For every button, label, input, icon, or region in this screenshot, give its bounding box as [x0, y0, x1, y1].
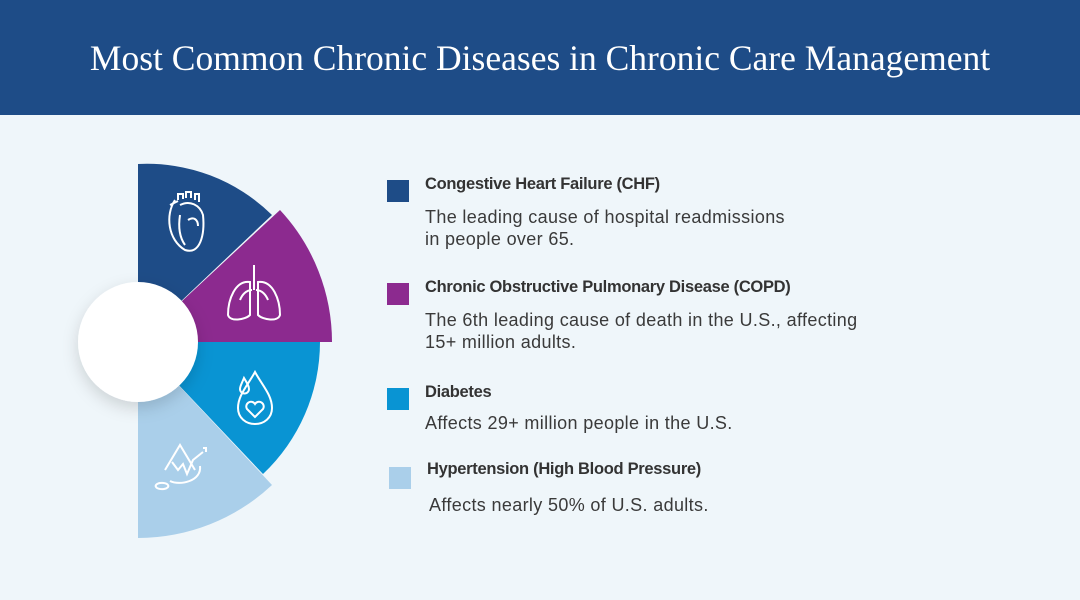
legend item: CHF [387, 175, 785, 249]
title: Most Common Chronic Diseases in Chronic Care Management [90, 38, 990, 78]
icon: lungs [228, 265, 280, 320]
legend item: Hypertension: Affects nearly 50% of U.S. adults. [429, 495, 709, 515]
icon: drop with heart [238, 372, 272, 424]
legend item: CHF: The leading cause of hospital readmissions [425, 207, 785, 227]
center circle [78, 282, 198, 402]
segment: COPD [138, 210, 332, 342]
segment: Diabetes [138, 342, 320, 474]
icon: heart [169, 192, 203, 251]
legend item: Hypertension: Hypertension (High Blood Pressure) [427, 460, 701, 478]
legend item: CHF: in people over 65. [425, 229, 574, 249]
legend item: Diabetes: Affects 29+ million people in the U.S. [425, 413, 733, 433]
icon: blood pressure [156, 445, 206, 489]
legend item: COPD: Chronic Obstructive Pulmonary Disease (COPD) [425, 278, 790, 296]
segment: CHF [138, 164, 272, 342]
legend item: CHF: Congestive Heart Failure (CHF) [425, 175, 660, 193]
header [0, 0, 1080, 115]
legend item: Hypertension [389, 460, 709, 515]
legend item: COPD: The 6th leading cause of death in the U.S., affecting [425, 310, 858, 330]
legend item: COPD [387, 278, 858, 352]
legend item: COPD: 15+ million adults. [425, 332, 576, 352]
legend item: Diabetes: Diabetes [425, 383, 491, 401]
legend item: Diabetes [387, 383, 733, 433]
chart: half donut [72, 164, 332, 538]
segment: Hypertension [138, 342, 272, 538]
